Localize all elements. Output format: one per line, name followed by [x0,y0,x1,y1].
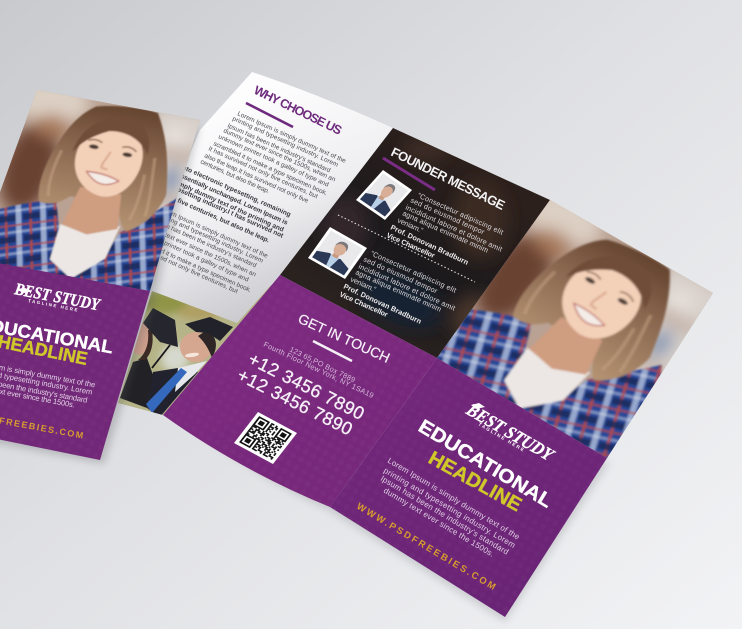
headline: EDUCATIONAL [414,415,556,513]
address: 123 65,PO Box 7889 [288,345,357,384]
panel: founder message [280,128,550,358]
shadow: open brochure [160,400,610,622]
text block: intro paragraph [199,110,347,205]
photo: graduates [118,285,272,415]
text block: intro paragraph: Lorem Ipsum is simply dummy text of the [236,110,347,165]
text block: intro paragraph: dummy text ever since the 1500s, when an [222,127,337,184]
text block: closing paragraph: Ipsum has been the industry's standard [152,217,258,270]
phone numbers: +12 3456 7890 [245,349,368,424]
quote: founder one: sed do eiusmod tempor [409,196,486,237]
graduate: man [146,317,233,417]
text block: bold paragraph: Into electronic typesetting, remaining [179,163,292,219]
text block: closing paragraph: dummy text ever since the 1500s, when an [143,222,257,279]
portrait: founder one [356,170,412,220]
text block: intro paragraph: It has survived not only five centuries, but [207,145,319,200]
text block: intro paragraph: centuries, but also the leap. [199,158,271,195]
text block: closing paragraph: printing and typesetting industry. Lorem [156,211,264,265]
text block: cover copy: Lorem Ipsum is simply dummy text of the [386,456,522,542]
quote: founder two: Vice Chancellor [338,290,390,319]
text block: cover copy: dummy text ever since the 1500s. [382,486,496,559]
logo: best study: TAGLINE HERE [28,298,78,313]
panel: get in touch [163,275,437,507]
panel: right cover [330,358,607,617]
quote: founder one: incididunt labore et dolore amit [404,203,504,254]
text block: bold paragraph: five centuries, but also the leap. [176,197,271,245]
text block: intro paragraph: Ipsum has been the industry's standard [226,122,332,175]
graduate: woman [120,308,178,408]
quote: founder one [385,191,505,267]
text block: cover copy [0,356,96,409]
text block: closing paragraph: Lorem Ipsum is simply dummy text of the [158,205,269,260]
text block: intro paragraph: scrambled it to make a type specimen book. [212,140,329,197]
shadow: left brochure [0,125,200,464]
logo: best study: BEST STUDY [462,400,559,465]
phone numbers: +12 3456 7890 [234,365,356,439]
quote: founder one: “Consectetur adipiscing elit [416,191,505,237]
heading: get in touch: GET IN TOUCH [296,310,392,366]
portrait: founder two [308,227,367,279]
quote: founder two: incididunt labore et dolore amit [357,262,457,313]
QR code [234,412,297,464]
address: Fourth Floor New York, NY 1SA19 [262,340,375,400]
quote: founder two: “Consectetur adipiscing elit [369,249,458,295]
heading: founder message: FOUNDER MESSAGE [389,144,508,213]
photo: student on left cover [0,90,200,291]
quote: founder two: agna aliqua enimnate minim [354,268,443,314]
quote: founder one: Vice Chancellor [385,231,437,260]
text block: cover copy: printing and typesetting industry. Lorem [382,466,517,550]
quote: founder one: agna aliqua enimnate minim [401,209,490,255]
text block: closing paragraph [160,212,268,294]
panel: why choose us [156,72,393,323]
quote: founder one: Prof. Donovan Bradburn [389,223,470,267]
quote: founder two: sed do eiusmod tempor [362,255,439,296]
logo: best study: BEST STUDY [12,279,103,315]
website: WWW.PSDFREEBIES.COM [354,501,497,593]
text block: intro paragraph: unknown printer took a galley of type and [217,133,330,189]
text block: closing paragraph: unknown printer took a galley of type and [137,228,250,284]
logo: best study: TAGLINE HERE [477,422,525,452]
text block: closing paragraph: It has survived not only five centuries, but [127,240,239,295]
panel: left cover [0,261,150,460]
text block: cover copy: Ipsum has been the industry's standard [379,474,510,557]
photo: student on right cover [437,200,713,458]
text block: intro paragraph: printing and typesetting industry. Lorem [231,115,339,169]
text block: closing paragraph: scrambled it to make a type specimen book. [136,237,253,294]
text block: bold paragraph: essentially unchanged. Lorem Ipsum is [176,171,289,227]
quote: founder two: Prof. Donovan Bradburn [342,282,423,326]
quote: founder two: veniam.” [349,275,378,294]
heading: why choose us: WHY CHOOSE US [252,83,344,138]
quote: founder one: veniam.” [396,216,425,235]
text block: bold paragraph: typesetting industry.I t has survived not [167,182,285,240]
text block: intro paragraph: also the leap.It has survived not only five [203,152,310,205]
quote: founder two [338,249,458,326]
text block: bold paragraph: simply dummy text of the printing and [172,178,285,234]
headline: HEADLINE [425,447,525,516]
